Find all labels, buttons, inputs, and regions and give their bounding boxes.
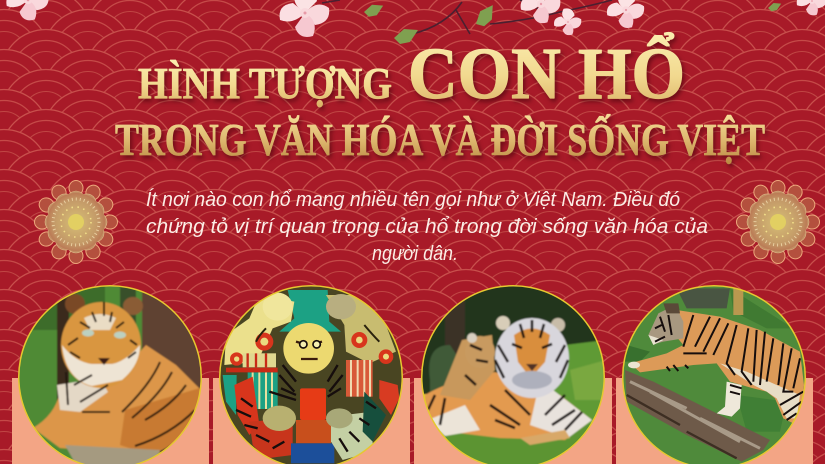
photo: tiger climbing a log (620, 285, 810, 464)
photo: tigress with cub (420, 284, 606, 464)
title line 1 large: CON HỔ (408, 31, 685, 114)
icon: left gold rosette (34, 180, 118, 264)
panel: card 1 (12, 378, 209, 464)
panel: card 4 (616, 378, 813, 464)
title line 1 small: HÌNH TƯỢNG (138, 59, 392, 108)
panel: card 3 (414, 378, 612, 464)
title (115, 31, 765, 165)
intro paragraph (146, 188, 708, 265)
photo: Dong Ho style tiger painting (216, 285, 406, 464)
photo: resting tiger (15, 280, 205, 464)
panel: card 2 (213, 378, 410, 464)
cherry blossom branches (6, 0, 825, 44)
intro paragraph: Ít nơi nào con hổ mang nhiều tên gọi như ở Việt Nam. Điều đó (146, 188, 680, 211)
icon: right gold rosette (736, 180, 820, 264)
intro paragraph: chứng tỏ vị trí quan trọng của hổ trong đời sống văn hóa của (146, 216, 708, 238)
intro paragraph: người dân. (372, 243, 458, 265)
